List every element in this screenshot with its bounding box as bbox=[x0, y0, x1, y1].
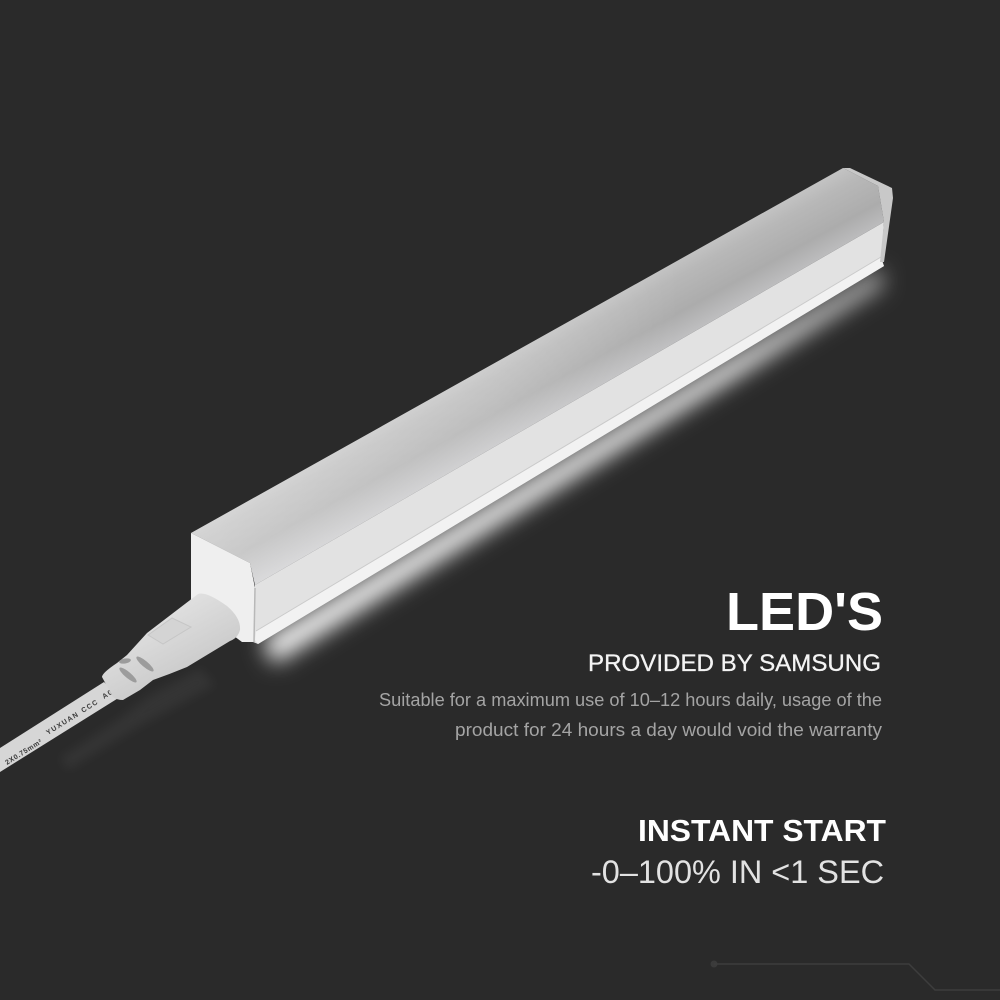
cable print: 2X0.75mm² bbox=[4, 738, 44, 767]
instant start value: -0–100% IN <1 SEC bbox=[591, 854, 884, 890]
cable print bbox=[4, 687, 118, 767]
subheading: provided by Samsung: PROVIDED BY SAMSUNG bbox=[588, 650, 881, 677]
edge of near cap bbox=[254, 588, 255, 642]
heading: LED'S: LED'S bbox=[726, 582, 883, 642]
decorative circuit line bbox=[710, 960, 1000, 990]
cable print: CCC bbox=[80, 699, 100, 715]
frosted lens bbox=[191, 168, 884, 585]
end cap near bbox=[191, 533, 255, 642]
usage note bbox=[379, 690, 882, 740]
plug grip bbox=[148, 618, 191, 644]
floor glow under the lamp bbox=[60, 268, 884, 770]
base ridge line bbox=[256, 257, 881, 631]
cable print: YUXUAN bbox=[45, 711, 81, 737]
heading: instant start: INSTANT START bbox=[638, 813, 886, 848]
power cable and plug bbox=[0, 594, 240, 772]
usage note: Suitable for a maximum use of 10–12 hours daily, usage of the bbox=[379, 690, 882, 710]
plug strain relief slots bbox=[118, 655, 155, 684]
end cap far bbox=[843, 168, 893, 262]
cable print: A0I bbox=[101, 687, 118, 701]
lamp base bbox=[253, 222, 884, 644]
LED tube lamp bbox=[191, 168, 893, 644]
cable bbox=[0, 682, 120, 772]
lens near-end brightening bbox=[191, 168, 884, 585]
base lower lip bbox=[255, 257, 884, 644]
usage note: product for 24 hours a day would void the warranty bbox=[455, 720, 882, 740]
plug body bbox=[102, 594, 240, 700]
